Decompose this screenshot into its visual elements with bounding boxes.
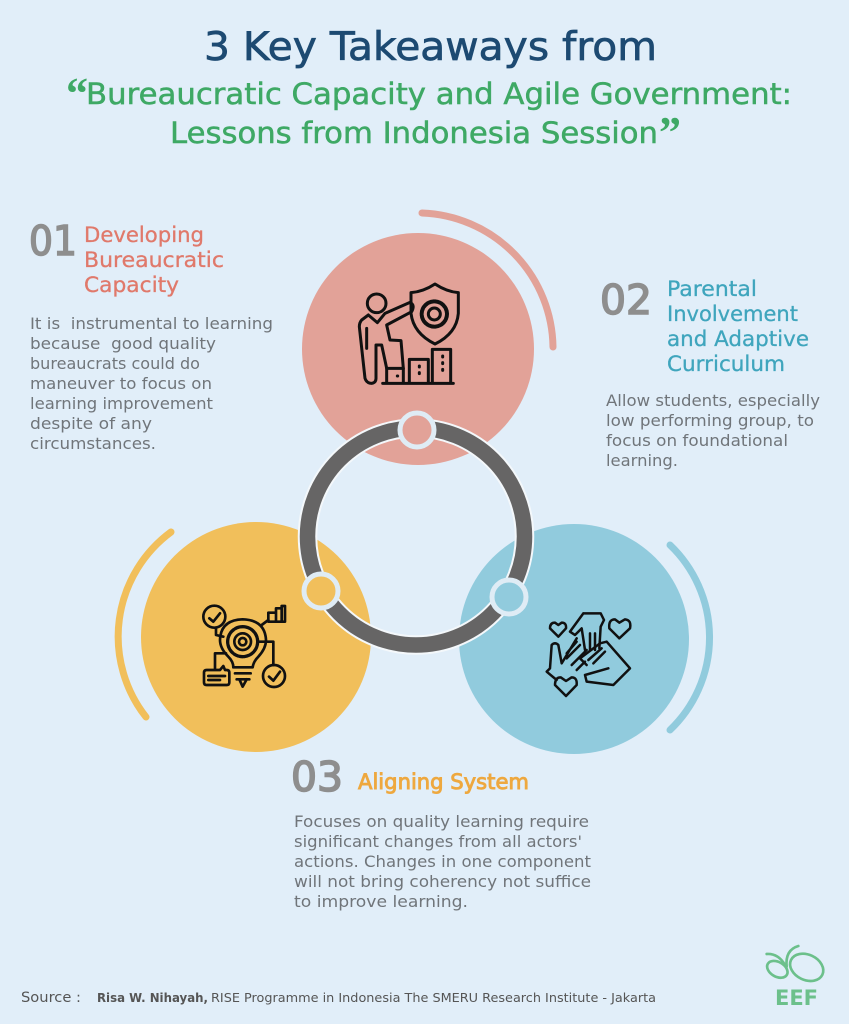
text block 01: because good quality [30,334,216,353]
text block 02: Allow students, especially [606,391,820,410]
step 01 text [29,217,224,297]
source line: Risa W. Nihayah, [97,990,208,1005]
source line: Source : [21,990,81,1006]
title [66,25,792,157]
ring node: yellow [304,574,338,608]
step 03 text: Aligning System [358,770,529,794]
text block 03 [294,812,591,911]
text block 03: significant changes from all actors' [294,832,582,851]
step 02 text: Parental [667,277,757,301]
logo: EEF: EEF [775,986,818,1010]
icon: person, shield and gear [359,284,458,383]
source line: RISE Programme in Indonesia The SMERU Research Institute - Jakarta [211,990,656,1005]
title: 3 Key Takeaways from [204,25,657,70]
text block 03: to improve learning. [294,892,468,911]
text block 03: Focuses on quality learning require [294,812,589,831]
text block 02: learning. [606,451,678,470]
central ring [308,428,524,645]
text block 01: maneuver to focus on [30,374,212,393]
text block 01: bureaucrats could do [30,354,200,373]
text block 02 [606,391,820,470]
source line [21,990,656,1006]
logo: EEF [764,946,828,1010]
ring node: blue [492,580,526,614]
panel: yellow circle with arc [118,522,371,752]
step 01 text: Developing [84,223,204,247]
text block 01: despite of any [30,414,152,433]
text block 03: will not bring coherency not suffice [294,872,591,891]
step 01 text: Bureaucratic [84,248,224,272]
text block 01: learning improvement [30,394,213,413]
text block 02: focus on foundational [606,431,788,450]
title: Lessons from Indonesia Session [170,116,658,150]
step 01 text: Capacity [84,273,179,297]
text block 02: low performing group, to [606,411,814,430]
title: Bureaucratic Capacity and Agile Government: [86,77,792,111]
step 03 text [291,753,529,801]
step 02 text: 02 [600,276,652,324]
panel: blue circle with arc [459,524,710,754]
step 02 text: Curriculum [667,352,785,376]
text block 03: actions. Changes in one component [294,852,591,871]
text block 01 [30,314,273,453]
step 02 text [600,276,809,376]
title: ” [659,108,681,157]
icon: hands and hearts [547,613,630,696]
step 02 text: Involvement [667,302,798,326]
step 02 text: and Adaptive [667,327,809,351]
text block 01: It is instrumental to learning [30,314,273,333]
panel: red circle with arc [302,213,553,465]
title: “ [66,69,88,118]
icon: light bulb with gear [203,606,285,687]
text block 01: circumstances. [30,434,156,453]
step 03 text: 03 [291,753,343,801]
ring node: red [400,413,434,447]
step 01 text: 01 [29,217,77,265]
